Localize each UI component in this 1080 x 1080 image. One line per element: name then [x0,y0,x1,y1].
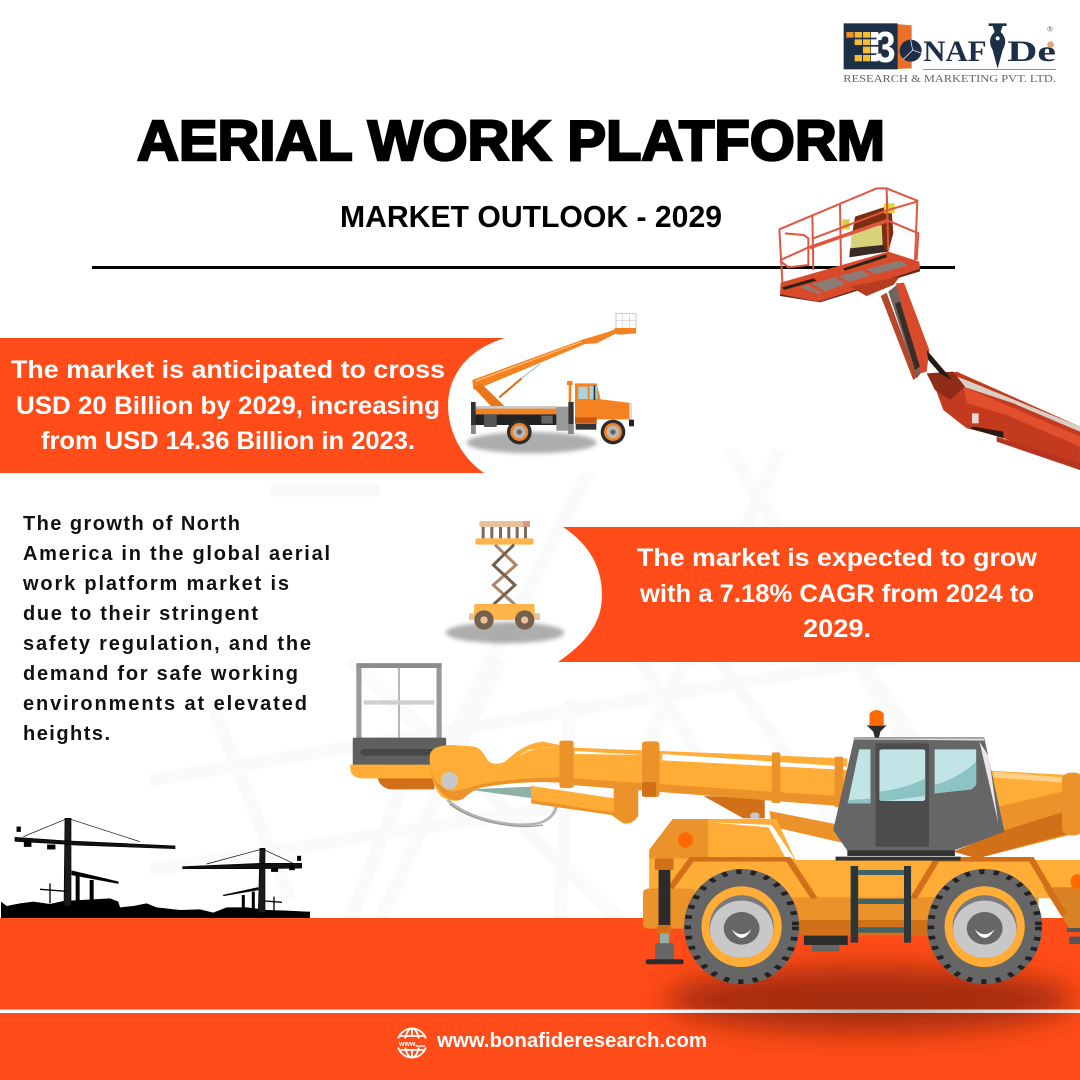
logo: De [1007,36,1056,68]
icon: scissor lift [446,521,564,643]
logo: 3 [875,23,896,72]
text block: North America growth: work platform market is [22,573,289,595]
image: aerial lift boom and basket [779,188,1080,470]
subtitle: MARKET OUTLOOK - 2029 [340,200,722,234]
basket [350,663,446,789]
banner text: The market is expected to grow [637,544,1038,572]
cab [833,737,1004,861]
hydraulic rod and cables [448,787,556,826]
beacon light [867,710,887,737]
icon: globe [396,1028,428,1058]
text block: North America growth: The growth of North [23,513,240,535]
outrigger [646,858,684,964]
footer divider line [0,1010,1080,1013]
icon: globe: www. [398,1041,417,1048]
panel: market size banner: from USD 14.36 Billion in 2023. [41,427,415,455]
truck body [643,819,1080,944]
website url: www.bonafideresearch.com [436,1030,707,1052]
banner text: The market is anticipated to cross [11,356,445,384]
image: yellow boom truck [350,663,1080,984]
main boom [430,741,847,843]
boom lower section [932,372,1080,470]
basket rails [779,188,918,287]
logo: ® [1047,24,1053,33]
text block: North America growth [22,513,330,745]
rear wheel [927,869,1042,984]
panel: market size banner [0,338,660,473]
truck ground shadow [665,968,1075,1032]
panel: market size banner: USD 20 Billion by 2029, increasing [16,392,440,420]
text block: North America growth: heights. [23,723,110,745]
text block: North America growth: America in the global aerial [23,543,330,565]
basket floor [780,252,920,302]
title: AERIAL WORK PLATFORM [137,109,885,173]
divider rule [92,266,955,269]
ladder [804,866,911,952]
boom upper arm [888,285,923,378]
text block: North America growth: safety regulation, and the [23,633,311,655]
text block: North America growth: due to their stringent [23,603,258,625]
image: crane skyline silhouette [1,818,310,918]
basket control panel [850,207,893,257]
logo [843,23,1056,85]
logo: RESEARCH & MARKETING PVT. LTD. [843,74,1056,85]
rear structure behind cab [954,771,1080,858]
logo: NAF [923,36,987,68]
text block: North America growth: environments at elevated [23,693,307,715]
panel: CAGR banner [558,527,1080,662]
front wheel [684,869,799,984]
panel: CAGR banner: with a 7.18% CAGR from 2024 to [639,580,1034,608]
footer band [0,918,1080,1080]
icon: boom truck [467,313,636,453]
text block: North America growth: demand for safe working [23,663,298,685]
panel: CAGR banner: 2029. [803,615,871,643]
